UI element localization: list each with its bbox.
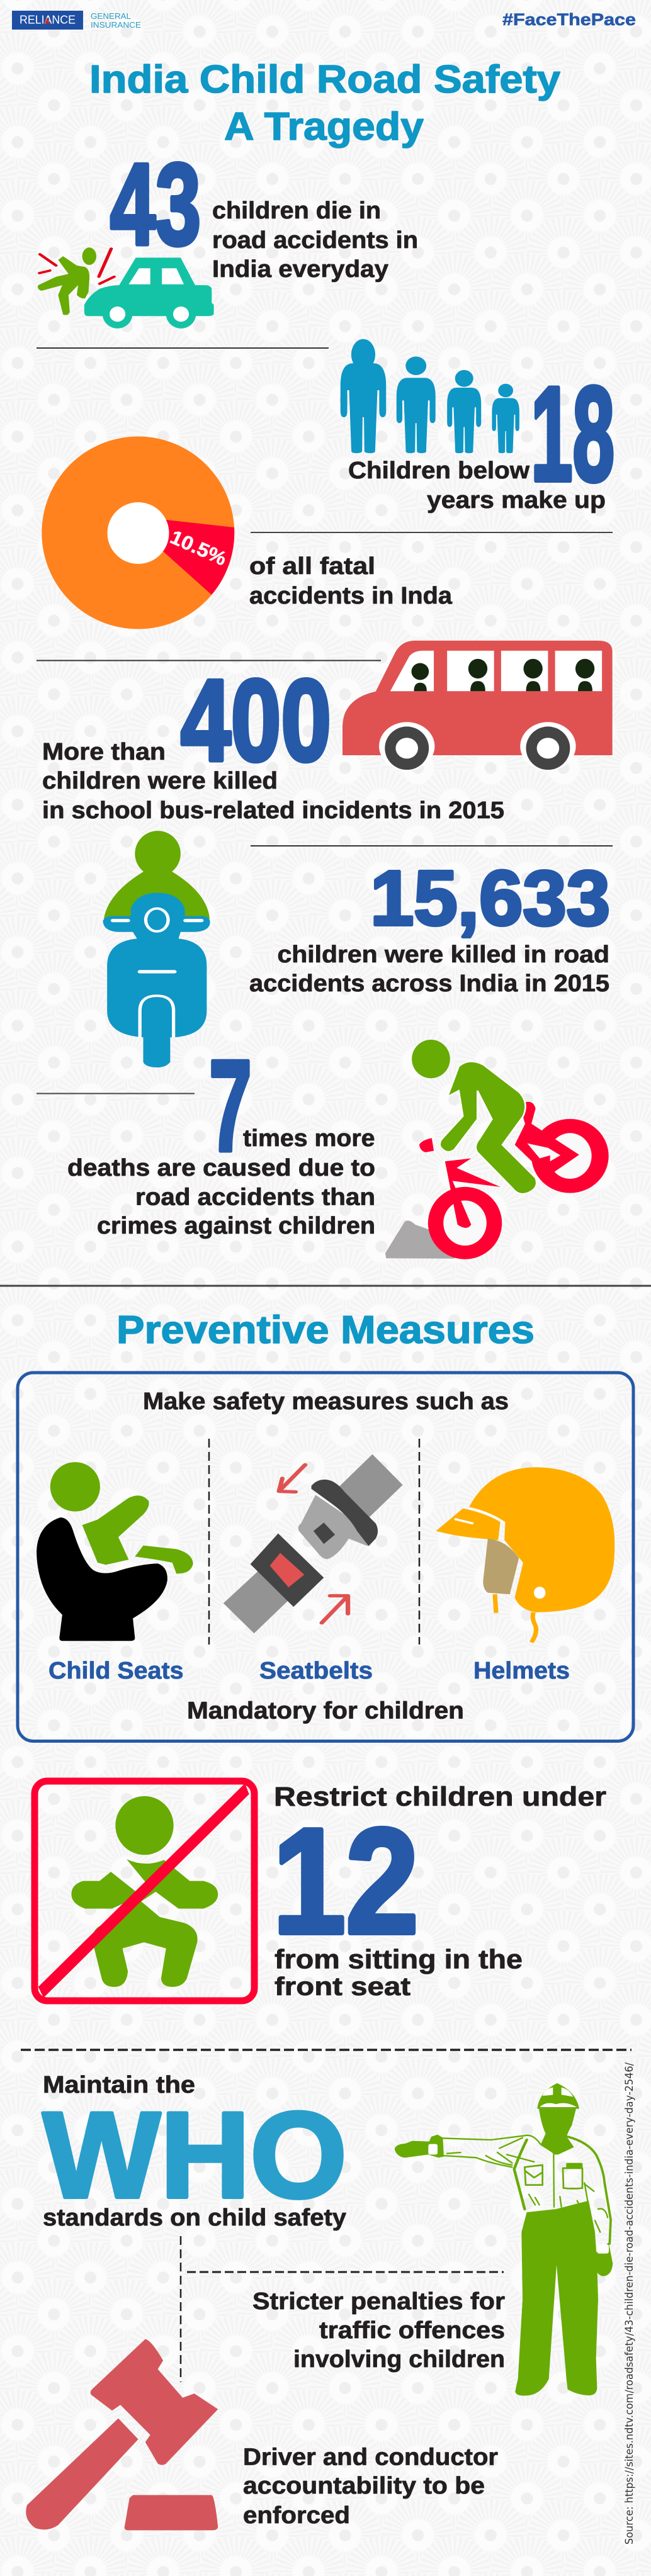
title: A Tragedy <box>224 105 424 149</box>
labels: child seats, seatbelts, helmets: Child Seats <box>48 1658 184 1684</box>
text: driver and conductor accountability: Driver and conductor <box>243 2444 498 2471</box>
text: children die in road accidents <box>212 198 418 283</box>
icon: child on bicycle <box>385 1040 609 1259</box>
text: times more deaths: road accidents than <box>135 1184 375 1211</box>
text: driver and conductor accountability <box>243 2444 498 2529</box>
number 7: 7 <box>209 1033 252 1178</box>
text: make safety measures: Make safety measures such as <box>143 1388 509 1415</box>
text: more than children were killed: in school bus-related incidents in 2015 <box>42 797 504 824</box>
text: restrict children under: Restrict children under <box>274 1782 606 1812</box>
icon: school bus <box>342 641 613 770</box>
text: more than children were killed: More than <box>42 739 166 765</box>
text: children killed across India <box>249 942 609 997</box>
text: times more deaths <box>67 1125 375 1239</box>
text: standards on child safety: standards on child safety <box>43 2205 346 2231</box>
text: times more deaths: deaths are caused due to <box>67 1155 375 1181</box>
text: of all fatal accidents <box>249 553 453 609</box>
icon: seatbelt <box>224 1454 403 1633</box>
text: children below years make up <box>348 458 606 514</box>
title <box>89 58 561 149</box>
icon: traffic policeman <box>395 2083 613 2396</box>
text: from sitting in the front seat: front seat <box>275 1972 410 2001</box>
chart: 10.5% donut <box>42 437 234 629</box>
text: children die in road accidents: road accidents in <box>212 227 418 254</box>
text: mandatory for children: Mandatory for children <box>187 1698 464 1724</box>
icon: child hit by car <box>38 247 214 329</box>
heading: preventive measures: Preventive Measures <box>116 1308 535 1352</box>
logo: Reliance General Insurance: RELIANCE <box>20 14 76 26</box>
text: driver and conductor accountability: enforced <box>243 2502 350 2529</box>
text: of all fatal accidents: accidents in Inda <box>249 583 453 609</box>
text: stricter penalties <box>252 2288 505 2373</box>
text: times more deaths: times more <box>243 1125 375 1152</box>
number 400: 400 <box>181 655 331 785</box>
icon: four child figures <box>341 339 519 453</box>
number 15,633: 15,633 <box>370 856 610 942</box>
title: India Child Road Safety <box>89 58 561 101</box>
icon: no child in front seat <box>35 1781 254 2001</box>
stat: 43 children <box>38 139 418 329</box>
logo: Reliance General Insurance: INSURANCE <box>91 20 141 30</box>
number 43: 43 <box>110 139 201 269</box>
text: children killed across India: accidents across India in 2015 <box>249 970 609 997</box>
text: stricter penalties: traffic offences <box>319 2317 505 2344</box>
labels: child seats, seatbelts, helmets: Helmets <box>473 1658 570 1684</box>
text: from sitting in the front seat: from sitting in the <box>275 1945 523 1975</box>
hashtag: #FaceThePace <box>502 10 636 29</box>
labels: child seats, seatbelts, helmets: Seatbelts <box>259 1658 373 1684</box>
text: maintain the: Maintain the <box>43 2072 195 2098</box>
text: more than children were killed <box>42 739 504 824</box>
text: children below years make up: Children below <box>348 458 529 484</box>
number 12: 12 <box>273 1798 419 1965</box>
icon: gavel <box>26 2339 218 2530</box>
stat: 400 school bus <box>42 641 613 824</box>
text: children die in road accidents: children die in <box>212 198 381 224</box>
text: children die in road accidents: India everyday <box>212 256 388 283</box>
panel: safety measures <box>18 1373 633 1741</box>
text: more than children were killed: children were killed <box>42 768 278 794</box>
stat: 7 times more <box>67 1033 609 1259</box>
chart: 10.5% donut: 10.5% <box>167 526 230 570</box>
labels: child seats, seatbelts, helmets <box>48 1658 570 1684</box>
icon: child seat <box>37 1462 193 1641</box>
text: children below years make up: years make up <box>427 487 606 514</box>
source citation: Source: https://sites.ndtv.com/roadsafety/43-children-die-road-accidents-india-every-day-2546/ <box>623 2062 636 2545</box>
text: children killed across India: children were killed in road <box>277 942 609 968</box>
stat: 15,633 scooter <box>103 831 610 1067</box>
text: stricter penalties: Stricter penalties for <box>252 2288 505 2315</box>
text: stricter penalties: involving children <box>293 2346 505 2373</box>
big word WHO: WHO <box>43 2087 347 2224</box>
text: driver and conductor accountability: accountability to be <box>243 2473 485 2499</box>
stat: children below 18 <box>341 339 614 514</box>
text: of all fatal accidents: of all fatal <box>249 553 375 580</box>
logo: Reliance General Insurance <box>12 11 141 30</box>
icon: child on scooter <box>103 831 210 1067</box>
logo: Reliance General Insurance: GENERAL <box>91 11 131 21</box>
text: times more deaths: crimes against children <box>97 1213 375 1239</box>
text: from sitting in the front seat <box>275 1945 523 2001</box>
icon: helmet <box>436 1467 614 1643</box>
